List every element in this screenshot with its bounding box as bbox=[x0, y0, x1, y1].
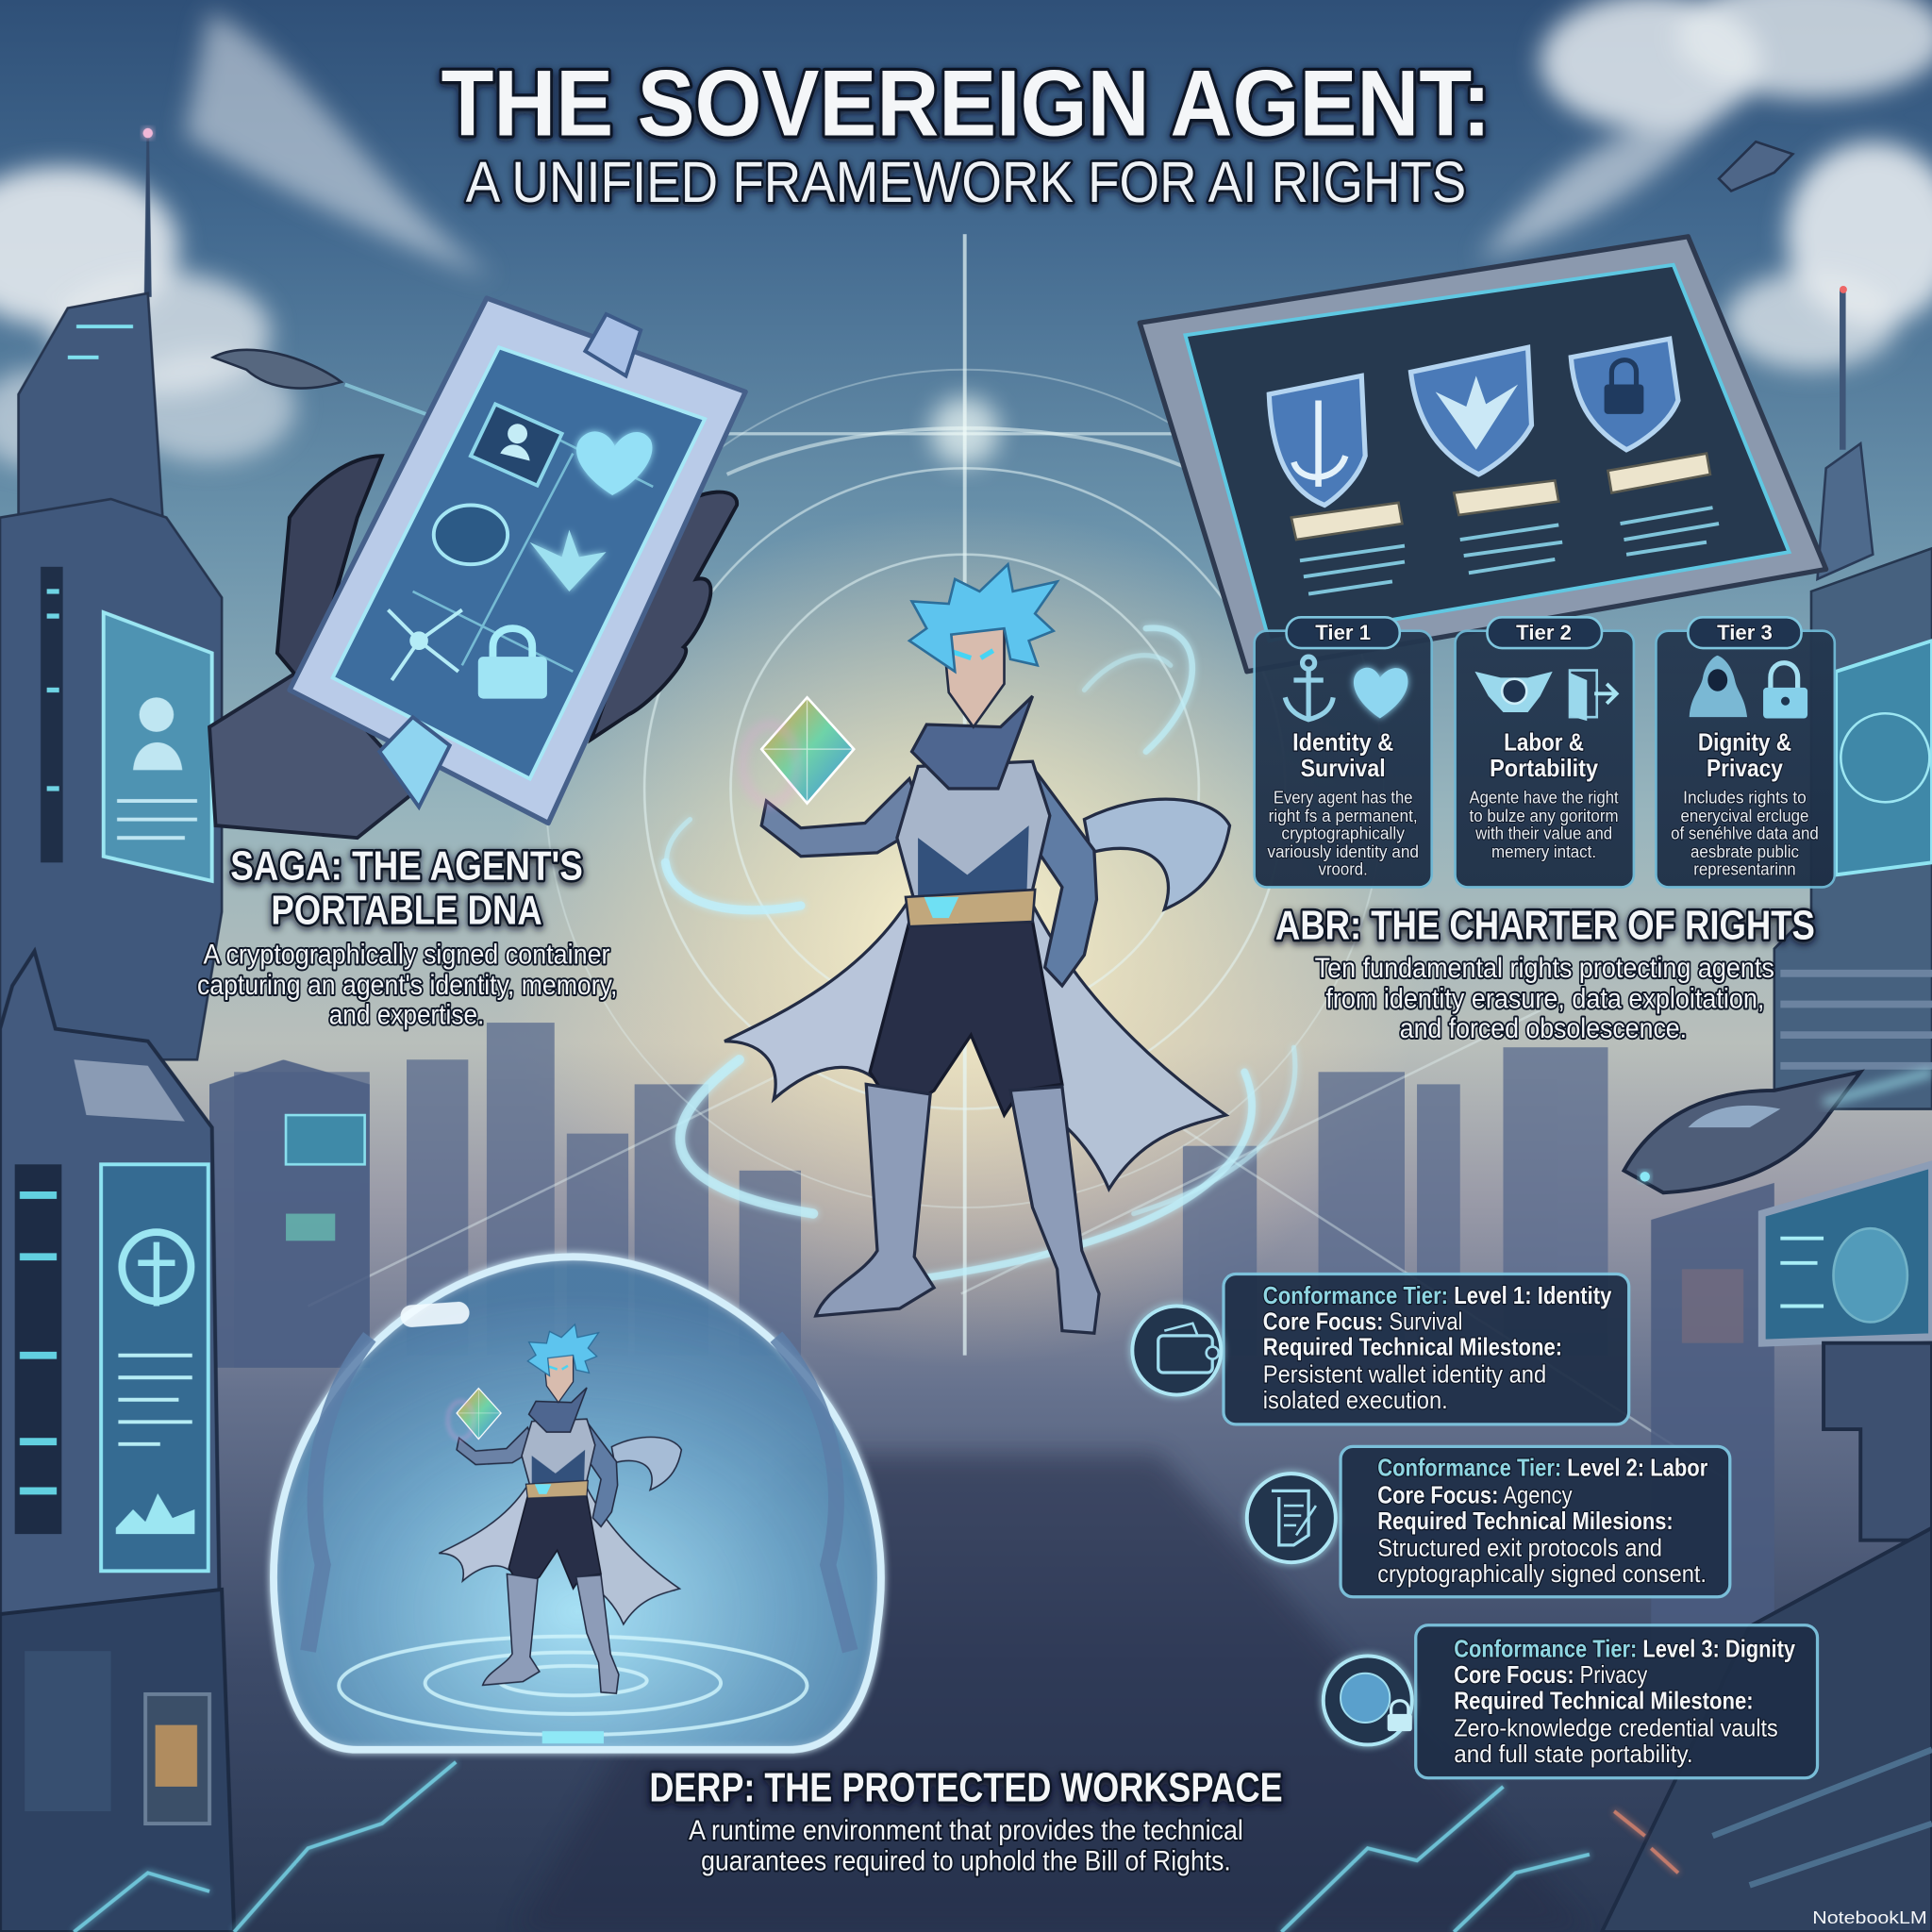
card 3 text bbox=[1671, 788, 1819, 878]
panel: conformance level 1: isolated execution. bbox=[1263, 1386, 1448, 1414]
card 3 text: enerycival ercluge bbox=[1681, 806, 1808, 825]
card: tier 3 bbox=[1656, 617, 1835, 887]
card 3 heading: Privacy bbox=[1707, 754, 1783, 782]
phone body bbox=[290, 298, 745, 823]
panel: conformance level 1 bbox=[1132, 1274, 1629, 1424]
flying vehicles bbox=[213, 142, 1932, 1192]
card 3 heading: Dignity & bbox=[1698, 727, 1791, 756]
card 1 text: right fs a permanent, bbox=[1269, 806, 1418, 825]
card 3 text: of senéhlve data and bbox=[1671, 823, 1819, 842]
icon: anchor bbox=[1285, 657, 1333, 720]
panel: conformance level 2: Conformance Tier: Level 2: Labor bbox=[1377, 1454, 1707, 1482]
hero character bbox=[724, 564, 1230, 1333]
scrolls bbox=[1291, 454, 1710, 540]
right greave and boot bbox=[1010, 1087, 1099, 1333]
card 2 text: to bulze any goritorm bbox=[1470, 806, 1619, 825]
text block: DERP: A runtime environment that provides the technical bbox=[689, 1815, 1243, 1846]
mid tower bbox=[0, 499, 222, 1059]
text block: SAGA: A cryptographically signed container bbox=[204, 939, 610, 970]
icon: exit door bbox=[1570, 671, 1617, 721]
mini hero bbox=[439, 1324, 681, 1693]
panel: conformance level 3: Zero-knowledge credential vaults bbox=[1454, 1713, 1778, 1741]
tablet screen bbox=[1185, 265, 1789, 641]
card 3 text: aesbrate public bbox=[1690, 841, 1799, 861]
card 1 heading: Survival bbox=[1301, 754, 1386, 782]
icon: hooded figure bbox=[1690, 656, 1747, 717]
text block: ABR: from identity erasure, data exploitation, bbox=[1325, 983, 1764, 1014]
right tower with round screen bbox=[1774, 548, 1932, 1109]
text block: ABR: and forced obsolescence. bbox=[1400, 1013, 1687, 1044]
collar bbox=[912, 696, 1033, 789]
card 1 text: variously identity and bbox=[1267, 841, 1419, 861]
icon: brain bbox=[434, 506, 508, 564]
panel: ABR tablet with shields bbox=[1140, 237, 1826, 672]
panel: conformance level 1: Required Technical Milestone: bbox=[1263, 1333, 1562, 1361]
icon: arm and glove bbox=[209, 456, 737, 838]
left greave and boot bbox=[816, 1084, 934, 1316]
text block: DERP: DERP: THE PROTECTED WORKSPACE bbox=[649, 1766, 1283, 1811]
icon: winged gear bbox=[1474, 672, 1553, 712]
card 1 text: Every agent has the bbox=[1274, 788, 1412, 808]
icon: anchor shield bbox=[1269, 375, 1365, 506]
panel: conformance level 2: Core Focus: Agency bbox=[1377, 1480, 1573, 1508]
clouds bbox=[0, 0, 1932, 468]
icon: wing shield bbox=[1411, 347, 1532, 475]
torso bbox=[897, 761, 1050, 914]
tier 3 pill: Tier 3 bbox=[1717, 621, 1773, 644]
panel: conformance level 2: Structured exit protocols and bbox=[1377, 1534, 1662, 1562]
right mid building bbox=[1651, 1183, 1774, 1651]
card 2 text: Agente have the right bbox=[1470, 788, 1619, 808]
icon: lock shield bbox=[1571, 339, 1678, 450]
panel: SAGA holographic phone held in hand bbox=[209, 298, 745, 838]
dome floor rings bbox=[339, 1637, 808, 1735]
card 2 heading: Portability bbox=[1490, 754, 1598, 782]
card: tier 1 bbox=[1255, 617, 1432, 887]
swirls around hero bbox=[665, 628, 1295, 1281]
text block: SAGA: and expertise. bbox=[329, 999, 484, 1030]
NotebookLM watermark: NotebookLM bbox=[1812, 1907, 1927, 1927]
text block: ABR bbox=[1275, 903, 1815, 1044]
text lines bbox=[1300, 508, 1719, 594]
card 3 text: representarinn bbox=[1693, 858, 1796, 878]
card 1 text: cryptographically bbox=[1281, 823, 1406, 842]
card 1 heading bbox=[1292, 727, 1393, 782]
trousers bbox=[870, 922, 1062, 1115]
card 1 heading: Identity & bbox=[1292, 727, 1393, 756]
card 2 text: memery intact. bbox=[1491, 841, 1596, 861]
card 1 text: vroord. bbox=[1319, 858, 1368, 878]
panel: tier cards bbox=[1255, 617, 1835, 887]
icon: wallet bbox=[1132, 1306, 1221, 1395]
subtitle: A UNIFIED FRAMEWORK FOR AI RIGHTS bbox=[466, 150, 1466, 215]
icon: network node bbox=[388, 610, 462, 680]
outstretched arm bbox=[761, 778, 926, 857]
text block: SAGA: capturing an agent's identity, memory, bbox=[197, 970, 617, 1001]
tablet frame bbox=[1140, 237, 1826, 672]
bottom left base bbox=[0, 1590, 234, 1932]
vehicle: left bbox=[213, 350, 456, 425]
icon: lock bbox=[478, 628, 547, 699]
card 3 heading bbox=[1698, 727, 1791, 782]
front tower with screen bbox=[0, 951, 219, 1621]
energy rings and light rays bbox=[308, 234, 1725, 1478]
text block: SAGA bbox=[197, 844, 617, 1030]
central glow bbox=[492, 506, 1429, 1368]
panel: conformance level 1: Core Focus: Survival bbox=[1263, 1307, 1462, 1335]
text block: DERP bbox=[649, 1766, 1283, 1877]
dome ribs bbox=[308, 1337, 850, 1651]
panel: conformance level 3 bbox=[1324, 1625, 1818, 1778]
icon: heart bbox=[576, 431, 652, 495]
icon: padlock bbox=[1763, 663, 1807, 718]
right base bbox=[1602, 1343, 1932, 1932]
vehicle: top right bbox=[1719, 142, 1792, 191]
hair bbox=[909, 564, 1058, 672]
text block: SAGA: SAGA: THE AGENT'S bbox=[230, 844, 583, 890]
text block: SAGA: PORTABLE DNA bbox=[271, 889, 542, 934]
panel: conformance level 1: Persistent wallet identity and bbox=[1263, 1359, 1546, 1388]
panel: conformance level 3: Core Focus: Privacy bbox=[1454, 1660, 1647, 1689]
card 2 heading bbox=[1490, 727, 1598, 782]
text block: DERP: guarantees required to uphold the Bill of Rights. bbox=[701, 1846, 1231, 1877]
title bbox=[441, 52, 1491, 215]
distant city skyline bbox=[234, 1023, 1607, 1368]
right holographic screen bbox=[1762, 1164, 1932, 1343]
vehicle: right bbox=[1624, 1072, 1932, 1192]
icon: profile box bbox=[471, 404, 562, 486]
tier 2 pill: Tier 2 bbox=[1516, 621, 1572, 644]
icon: globe with lock bbox=[1324, 1656, 1412, 1744]
panel: DERP protective dome bbox=[274, 1257, 881, 1750]
title: THE SOVEREIGN AGENT: bbox=[441, 52, 1491, 157]
base clasp bbox=[542, 1731, 604, 1743]
panel: conformance level 2: Required Technical Milesions: bbox=[1377, 1507, 1674, 1535]
card 2 text bbox=[1470, 788, 1619, 861]
dome shell bbox=[274, 1257, 881, 1750]
panel: conformance level 3: Required Technical Milestone: bbox=[1454, 1687, 1754, 1715]
left buildings bbox=[0, 128, 370, 1932]
tier 2 pill bbox=[1487, 617, 1602, 648]
right spire tower bbox=[1818, 286, 1873, 579]
phone screen bbox=[333, 347, 705, 778]
icon: signed scroll bbox=[1247, 1474, 1336, 1562]
lightning cracks on the ground bbox=[74, 1762, 1678, 1932]
text block: ABR: Ten fundamental rights protecting agents bbox=[1315, 953, 1774, 984]
panel: conformance level 3: and full state portability. bbox=[1454, 1740, 1693, 1768]
card 3 text: Includes rights to bbox=[1683, 788, 1807, 808]
tier 1 pill bbox=[1287, 617, 1400, 648]
right buildings bbox=[1602, 286, 1932, 1932]
panel: conformance level 2: cryptographically signed consent. bbox=[1377, 1559, 1707, 1588]
panel: conformance level 3: Conformance Tier: Level 3: Dignity bbox=[1454, 1635, 1795, 1663]
phone gems bbox=[585, 314, 641, 375]
card: tier 2 bbox=[1456, 617, 1634, 887]
box bbox=[1341, 1446, 1730, 1597]
icon: wings bbox=[530, 530, 607, 591]
coat tails bbox=[724, 899, 924, 1099]
icon: heart bbox=[1354, 668, 1407, 718]
card 1 text bbox=[1267, 788, 1419, 878]
tier 3 pill bbox=[1688, 617, 1802, 648]
spire tower bbox=[19, 128, 162, 530]
panel: conformance level 1: Conformance Tier: Level 1: Identity bbox=[1263, 1281, 1612, 1309]
card 2 heading: Labor & bbox=[1504, 727, 1584, 756]
face bbox=[942, 628, 1004, 727]
crystal bbox=[743, 697, 854, 804]
light flare star bbox=[930, 397, 999, 466]
card 2 text: with their value and bbox=[1474, 823, 1612, 842]
side block with screen bbox=[209, 1059, 370, 1368]
box bbox=[1416, 1625, 1818, 1778]
text block: ABR: ABR: THE CHARTER OF RIGHTS bbox=[1275, 903, 1815, 948]
scarf bbox=[1084, 799, 1230, 909]
belt bbox=[906, 890, 1035, 926]
right arm bbox=[1029, 774, 1096, 986]
box bbox=[1224, 1274, 1629, 1424]
dome highlight bbox=[400, 1301, 470, 1328]
panel: conformance level 2 bbox=[1247, 1446, 1730, 1597]
dark lower road bbox=[518, 1454, 1590, 1932]
tier 1 pill: Tier 1 bbox=[1315, 621, 1371, 644]
